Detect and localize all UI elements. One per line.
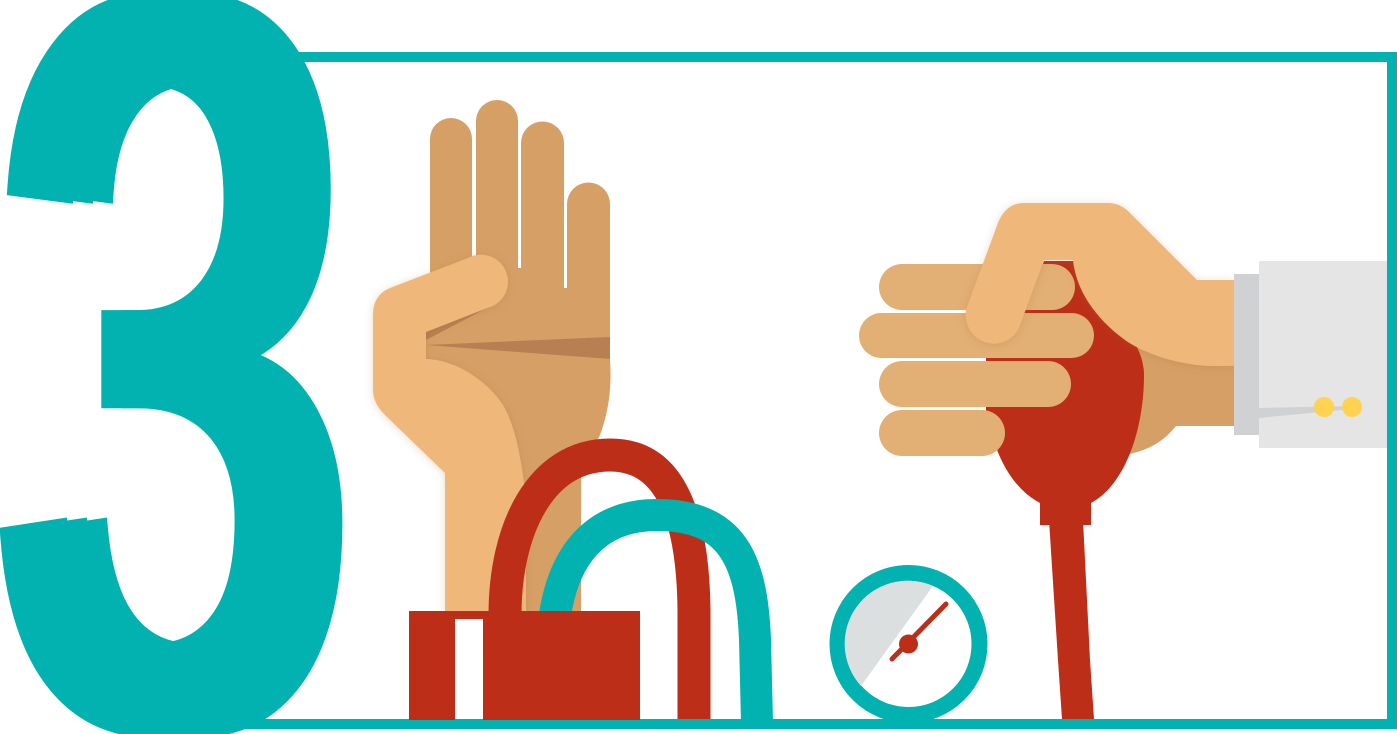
squeezing fingers — [859, 264, 1094, 456]
red tube — [505, 455, 694, 719]
wrist crease — [426, 337, 610, 359]
pressure gauge — [838, 573, 980, 719]
under hand — [1115, 345, 1234, 456]
sleeve — [1234, 261, 1387, 448]
cuff buttons — [1314, 397, 1362, 417]
thumb crease — [426, 309, 485, 340]
raised hand — [373, 100, 611, 611]
pressure cuff — [409, 611, 640, 720]
bulb tube — [1049, 520, 1094, 719]
thumb and wrist — [373, 255, 526, 611]
frame — [215, 52, 1397, 729]
squeeze bulb — [986, 261, 1144, 525]
teal tube — [555, 515, 757, 722]
thumb and back of hand — [966, 203, 1234, 366]
palm and fingers — [426, 100, 611, 611]
